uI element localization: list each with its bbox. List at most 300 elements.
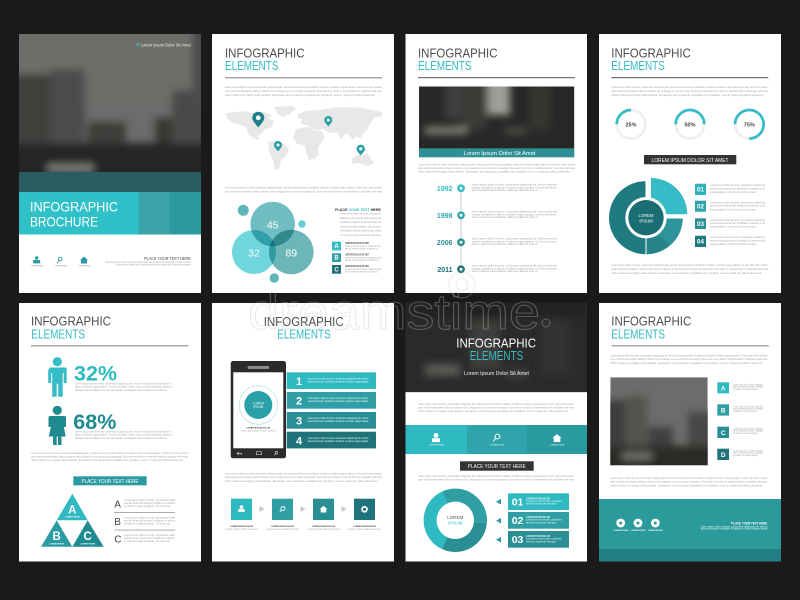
donut chart: IPSUM [448, 520, 463, 526]
paragraph: Lorem ipsum dolor sit amet, consectetur adipiscing elit, sed do eiusmod tempor incididunt ut labore et dolore magna aliqua. Ut enim ad minim veniam [611, 85, 769, 89]
timeline item 1998: 1998 [437, 213, 453, 220]
item 01: magna aliqua. Ut enim ad minim veniam [710, 190, 757, 194]
bar 2: Lorem ipsum dolor sit amet, consectetur adipiscing elit, sed do [308, 396, 369, 400]
process tile: gear: Lorem ipsum dolor sit amet [348, 527, 381, 531]
stat 32%: laboris nisi ut aliquip ex ea commodo consequat. Duis aute irure dolor in [75, 388, 168, 392]
map pin: Australia [356, 145, 365, 156]
paragraph: cillum dolore eu fugiat nulla pariatur. Excepteur sint occaecat cupidatat non proident, sunt in culpa qui officia deserunt [31, 458, 183, 462]
box 01: LOREM IPSUM DOLOR [526, 496, 550, 500]
bottom paragraph: quis nostrud exercitation ullamco laboris nisi ut aliquip ex ea commodo consequat. Duis aute irure dolor in reprehenderit in voluptate velit esse [611, 267, 769, 271]
heading [264, 314, 344, 341]
list A B C: sed do eiusmod tempor incididunt ut labore [124, 519, 175, 523]
box 03: sed do eiusmod tempor [526, 539, 556, 543]
box 03: Lorem ipsum dolor sit amet, consectetur [526, 537, 562, 541]
box 01 [508, 493, 569, 510]
venn text block [335, 207, 381, 237]
heading: INFOGRAPHIC [611, 314, 691, 329]
triangle diagram: B [53, 531, 61, 543]
timeline item 2011: tempor incididunt ut labore et dolore magna aliqua. Ut enim ad minim [472, 266, 557, 270]
timeline item 2006 [437, 236, 557, 247]
stat 32% [74, 362, 172, 392]
panel: smartphone page [212, 303, 394, 562]
bottom paragraph: cillum dolore eu fugiat nulla pariatur. Excepteur sint occaecat cupidatat non proident, sunt in culpa qui officia deserunt [611, 271, 762, 275]
list A B C D [717, 382, 763, 460]
heading: ELEMENTS [31, 327, 85, 341]
list A B C [332, 241, 381, 274]
paragraph [225, 472, 383, 483]
panel: timeline page [406, 34, 587, 293]
header photo [405, 300, 587, 392]
bar 4: Lorem ipsum dolor sit amet, consectetur adipiscing elit, sed do [308, 436, 369, 440]
bar 2: 2 [296, 396, 302, 408]
heading [225, 45, 382, 78]
photo caption band: Lorem Ipsum Dolor Sit Amet [464, 151, 536, 157]
progress ring 75% [735, 110, 764, 139]
box 02: sed do eiusmod tempor [526, 520, 556, 524]
paragraph: quis nostrud exercitation ullamco laboris nisi ut aliquip ex ea commodo consequat. Duis aute irure dolor in reprehenderit in voluptate velit esse [611, 89, 769, 93]
panel: cover brochure page [19, 34, 201, 293]
triangle diagram: A [68, 504, 76, 516]
item 04 [695, 235, 765, 247]
timeline item 1992: quis nostrud exercitation ullamco laboris nisi ut [472, 188, 538, 192]
bar 3: Lorem ipsum dolor sit amet, consectetur adipiscing elit, sed do [308, 416, 369, 420]
map caption paragraph: Lorem ipsum dolor sit amet, consectetur adipiscing elit, sed do eiusmod tempor incididunt ut labore et dolore magna aliqua. Ut enim ad minim veniam [225, 186, 383, 190]
item D [717, 448, 763, 460]
world map [226, 106, 382, 170]
timeline item 1992: 1992 [437, 186, 453, 193]
item D: D [721, 452, 726, 459]
icon: home [550, 434, 565, 446]
process tile: search: LOREM IPSUM DOLOR [271, 526, 294, 528]
footer text [701, 522, 768, 531]
item A [717, 382, 763, 393]
heading [611, 314, 769, 346]
stat 68%: laboris nisi ut aliquip ex ea commodo consequat. Duis aute irure dolor in [75, 436, 168, 440]
list A B C: LOREM IPSUM DOLOR SIT AMET [345, 241, 369, 245]
box 03: 03 [512, 534, 524, 546]
icon: search: LOREM IPSUM [490, 444, 505, 446]
list A B C: LOREM IPSUM DOLOR SIT AMET [345, 252, 369, 256]
list A B C [114, 498, 175, 546]
paragraph: cillum dolore eu fugiat nulla pariatur. Excepteur sint occaecat cupidatat non proident, sunt in culpa qui officia deserunt [418, 170, 570, 174]
list A B C: sed do eiusmod tempor incididunt ut [345, 270, 378, 274]
stat 68%: Lorem ipsum dolor sit amet, consectetur adipiscing elit, sed do eiusmod tempor incididunt ut [75, 430, 172, 434]
process tile: home: Lorem ipsum dolor sit amet [308, 527, 340, 531]
item 04: sed do eiusmod tempor incididunt ut labore et do [710, 238, 765, 242]
list A B C: et dolore magna aliqua. Ut enim ad [124, 522, 171, 526]
triangle diagram: LOREM IPSUM [65, 516, 80, 518]
process tile: gear: LOREM IPSUM DOLOR [353, 526, 376, 528]
item C: Lorem ipsum dolor sit amet, consectetur [733, 426, 763, 430]
footer text: eiusmod tempor incididunt ut labore et dolore magna aliqua [701, 527, 768, 531]
box 01: sed do eiusmod tempor [526, 502, 556, 506]
box 03 [508, 531, 569, 548]
bar 4 [287, 432, 376, 448]
list A B C: sed do eiusmod tempor incididunt ut labore [124, 501, 175, 505]
bar 1: eiusmod tempor incididunt ut labore et dolore magna aliqua [308, 380, 369, 384]
footer icons: LOREM IPSUM [648, 530, 663, 532]
pie chart [609, 178, 687, 254]
paragraph: cillum dolore eu fugiat nulla pariatur. Excepteur sint occaecat cupidatat non proident, sunt in culpa qui officia deserunt [611, 93, 764, 97]
smartphone [231, 361, 286, 458]
paragraph [31, 451, 189, 462]
arrow [260, 506, 264, 512]
smartphone: Lorem ipsum dolor sit amet, consect [241, 428, 275, 432]
item D: ut labore et dolore magna [733, 453, 758, 457]
cover icons row [31, 256, 90, 268]
bar 4: 4 [296, 435, 303, 447]
item A: A [721, 385, 726, 392]
smartphone: IPSUM [253, 405, 264, 409]
map pin: South America [274, 141, 282, 152]
map pin: Asia [324, 116, 332, 126]
item 03 [695, 218, 765, 229]
donut chart [430, 495, 480, 545]
black label: LOREM IPSUM DOLOR SIT AMET [652, 158, 729, 164]
process tile: person [226, 499, 258, 531]
stat 68%: labore et dolore magna aliqua. Ut enim ad minim veniam, quis nostrud exercitation ullamco [75, 433, 172, 437]
box 02: 02 [512, 515, 524, 527]
heading [611, 45, 768, 78]
item A: ut labore et dolore magna [733, 387, 758, 391]
item 02: sed do eiusmod tempor incididunt ut labore et do [710, 204, 765, 208]
header title [456, 336, 536, 377]
paragraph: Lorem ipsum dolor sit amet, consectetur adipiscing elit, sed do eiusmod tempor incididunt ut labore et dolore magna aliqua. Ut enim ad minim veniam [418, 474, 575, 478]
arrow [342, 506, 346, 512]
photo caption band [419, 148, 574, 157]
timeline item 1998: quis nostrud exercitation ullamco laboris nisi ut [472, 215, 538, 219]
paragraph: quis nostrud exercitation ullamco laboris nisi ut aliquip ex ea commodo consequat. Duis aute irure dolor in reprehenderit in voluptate velit esse [418, 166, 575, 170]
box 01: Lorem ipsum dolor sit amet, consectetur [526, 499, 562, 503]
cover text block: Lorem ipsum dolor sit amet, consectetur adipiscing elit, sed do eiusmod tempor incididunt ut labore et dolore [105, 260, 191, 264]
timeline item 2006: 2006 [437, 240, 453, 247]
paragraph: quis nostrud exercitation ullamco laboris nisi ut aliquip ex ea commodo consequat. Duis aute irure dolor in reprehenderit in voluptate velit esse [418, 478, 574, 482]
venn diagram: 32 [248, 248, 260, 260]
heading: INFOGRAPHIC [31, 314, 111, 329]
photo [419, 86, 574, 148]
map caption paragraph: quis nostrud exercitation ullamco laboris nisi ut aliquip ex ea commodo consequat. Duis aute irure dolor in reprehenderit in voluptate velit esse [225, 190, 382, 194]
stat 32%: 32% [74, 362, 117, 386]
progress ring 50% [676, 110, 704, 139]
item C [717, 426, 763, 438]
stat 68%: 68% [73, 410, 116, 434]
list A B C: et dolore magna aliqua. Ut enim ad [124, 539, 171, 543]
list A B C: et dolore magna aliqua. Ut enim ad [124, 504, 171, 508]
timeline item 1998 [437, 210, 557, 220]
panel: people statistics page [19, 303, 201, 562]
intro paragraph [225, 85, 383, 97]
pie chart: IPSUM [639, 218, 653, 223]
timeline item 2011: 2011 [437, 267, 453, 274]
venn diagram: 89 [285, 248, 297, 260]
stat 68% [73, 410, 172, 440]
item 02: 02 [697, 204, 704, 211]
timeline item 2006: quis nostrud exercitation ullamco laboris nisi ut [472, 242, 538, 246]
timeline item 2006: tempor incididunt ut labore et dolore magna aliqua. Ut enim ad minim [472, 239, 557, 243]
icon: person: LOREM IPSUM [429, 444, 444, 446]
process tile: person: LOREM IPSUM DOLOR [230, 526, 253, 528]
bar 3: eiusmod tempor incididunt ut labore et dolore magna aliqua [308, 419, 369, 423]
bar 3 [287, 412, 376, 429]
cover icons row: LOREM IPSUM [55, 266, 67, 268]
bar 1 [287, 372, 376, 389]
item 01: sed do eiusmod tempor incididunt ut labore et do [710, 186, 765, 190]
paragraph: Lorem ipsum dolor sit amet, consectetur adipiscing elit, sed do eiusmod tempor incididunt ut labore et dolore magna aliqua. Ut enim ad minim veniam [418, 402, 575, 406]
item B: B [721, 407, 726, 414]
triangle diagram: LOREM IPSUM [49, 544, 64, 546]
heading: INFOGRAPHIC [264, 314, 344, 329]
paragraph: cillum dolore eu fugiat nulla pariatur. Excepteur sint occaecat cupidatat non proident, sunt in culpa qui officia deserunt [418, 409, 568, 413]
black label: PLACE YOUR TEXT HERE [468, 464, 526, 470]
item 02: magna aliqua. Ut enim ad minim veniam [710, 207, 757, 211]
icon: home: LOREM IPSUM [550, 444, 565, 446]
progress ring 25%: 25% [625, 122, 637, 128]
cover photo of blurred city skyline [19, 34, 201, 172]
intro paragraph: Lorem ipsum dolor sit amet, consectetur adipiscing elit, sed do eiusmod tempor incididunt ut labore et dolore magna aliqua. Ut enim ad minim veniam [225, 85, 383, 89]
bar 4: eiusmod tempor incididunt ut labore et dolore magna aliqua [308, 439, 369, 443]
cover icons row: LOREM IPSUM [78, 266, 90, 268]
black label [644, 155, 736, 164]
progress ring 75%: 75% [744, 122, 755, 128]
item A: sed do eiusmod tempor incididunt [733, 385, 763, 389]
venn text block: incididunt ut labore et dolore magna ali [340, 220, 381, 224]
panel: photo list page [599, 303, 781, 562]
cover text block [105, 256, 191, 267]
item B [717, 404, 763, 416]
arrows [496, 499, 501, 542]
icon: search [490, 434, 505, 446]
paragraph: quis nostrud exercitation ullamco laboris nisi ut aliquip ex ea commodo consequat. Duis aute irure dolor in reprehenderit in voluptate velit esse [610, 357, 768, 361]
map caption paragraph [225, 186, 383, 194]
pie chart: LOREM [639, 213, 654, 218]
paragraph: cillum dolore eu fugiat nulla pariatur. Excepteur sint occaecat cupidatat non proident, sunt in culpa qui officia deserunt [610, 484, 763, 488]
cover text block: Ut enim ad minim veniam, quis nostrud exercitation ullamco laboris nisi ut aliquip ex ea commodo [115, 263, 191, 267]
paragraph: Lorem ipsum dolor sit amet, consectetur adipiscing elit, sed do eiusmod tempor incididunt ut labore et dolore magna aliqua. Ut enim ad minim veniam [225, 472, 383, 476]
timeline [437, 182, 557, 274]
panel: map and venn page [212, 34, 394, 293]
paragraph [610, 354, 768, 365]
footer icons: LOREM IPSUM [613, 530, 628, 532]
progress ring 50%: 50% [684, 122, 696, 128]
numbered bars [287, 372, 376, 448]
panel: dark header page [405, 300, 587, 562]
item 03: 03 [697, 221, 704, 228]
heading: ELEMENTS [611, 327, 665, 341]
item 01 [695, 183, 765, 195]
paragraph: cillum dolore eu fugiat nulla pariatur. Excepteur sint occaecat cupidatat non proident, sunt in culpa qui officia deserunt [610, 361, 763, 365]
item 03: magna aliqua. Ut enim ad minim veniam [710, 225, 757, 229]
list A B C: sed do eiusmod tempor incididunt ut [345, 246, 378, 250]
footer text: PLACE YOUR TEXT HERE [731, 522, 768, 526]
timeline item 1992 [437, 182, 557, 193]
item A: Lorem ipsum dolor sit amet, consectetur [733, 382, 763, 386]
cover title band: INFOGRAPHIC [30, 198, 118, 214]
icon: woman [49, 406, 66, 445]
list A B C: A [334, 244, 339, 250]
paragraph: quis nostrud exercitation ullamco laboris nisi ut aliquip ex ea commodo consequat. Duis aute irure dolor in reprehenderit in voluptate velit esse [31, 454, 188, 458]
map pin: North America [252, 112, 264, 128]
heading: INFOGRAPHIC [611, 45, 691, 60]
footer icons: LOREM IPSUM [631, 530, 646, 532]
footer icons [613, 519, 663, 532]
cover tagline: Lorem Ipsum Dolor Sit Amet [141, 42, 191, 47]
list A B C: C [114, 534, 122, 546]
stat 32%: labore et dolore magna aliqua. Ut enim ad minim veniam, quis nostrud exercitation ullamco [75, 385, 172, 389]
bar 1: 1 [296, 376, 302, 388]
paragraph: Lorem ipsum dolor sit amet, consectetur adipiscing elit, sed do eiusmod tempor incididunt ut labore et dolore magna aliqua. Ut enim ad minim veniam [610, 476, 768, 480]
venn text block: ex ea commodo consequat duis aute [340, 233, 381, 237]
arrow [300, 506, 306, 512]
heading: INFOGRAPHIC [418, 45, 498, 60]
item 04: magna aliqua. Ut enim ad minim veniam [710, 242, 757, 246]
item 04: Lorem ipsum dolor sit amet, consectetur adipiscing [710, 235, 765, 239]
watermark: dreamstime [248, 284, 540, 340]
item C: sed do eiusmod tempor incididunt [733, 429, 763, 433]
item 01: Lorem ipsum dolor sit amet, consectetur adipiscing [710, 183, 765, 187]
smartphone: LOREM IPSUM DOLOR [246, 427, 271, 429]
list A B C: Lorem ipsum dolor sit amet, consectetur adipi [124, 533, 175, 537]
list A B C: B [334, 256, 339, 262]
list A B C: Lorem ipsum dolor sit amet, consectetur adipi [345, 244, 381, 248]
list A B C: sed do eiusmod tempor incididunt ut [345, 258, 378, 262]
list A B C: LOREM IPSUM DOLOR SIT AMET [345, 264, 369, 268]
header title: ELEMENTS [470, 349, 523, 363]
bottom paragraph: Lorem ipsum dolor sit amet, consectetur adipiscing elit, sed do eiusmod tempor incididunt ut labore et dolore magna aliqua. Ut enim ad minim veniam [611, 263, 769, 267]
triangle diagram [41, 494, 104, 547]
icon band [406, 425, 587, 454]
paragraph: quis nostrud exercitation ullamco laboris nisi ut aliquip ex ea commodo consequat. Duis aute irure dolor in reprehenderit in voluptate velit esse [610, 480, 768, 484]
teal footer [599, 499, 781, 562]
teal label [73, 476, 147, 485]
intro paragraph: quis nostrud exercitation ullamco laboris nisi ut aliquip ex ea commodo consequat. Duis aute irure dolor in reprehenderit in voluptate velit esse [225, 89, 382, 93]
triangle diagram: C [84, 531, 92, 543]
paragraph: quis nostrud exercitation ullamco laboris nisi ut aliquip ex ea commodo consequat. Duis aute irure dolor in reprehenderit in voluptate velit esse [225, 475, 382, 479]
process tile: gear [348, 499, 381, 531]
dark teal band [19, 172, 201, 192]
item 02: Lorem ipsum dolor sit amet, consectetur adipiscing [710, 200, 765, 204]
heading: ELEMENTS [611, 59, 665, 73]
list A B C: Lorem ipsum dolor sit amet, consectetur adipi [124, 516, 175, 520]
cover title band [19, 192, 201, 234]
timeline item 2011: Lorem ipsum dolor sit amet, consectetur adipiscing elit, sed do eiusmod [472, 264, 557, 268]
item 03: Lorem ipsum dolor sit amet, consectetur adipiscing [710, 218, 765, 222]
item D: Lorem ipsum dolor sit amet, consectetur [733, 448, 763, 452]
list A B C: B [114, 517, 121, 528]
process tile: search [266, 499, 299, 531]
box 02: Lorem ipsum dolor sit amet, consectetur [526, 518, 562, 522]
list A B C: Lorem ipsum dolor sit amet, consectetur adipi [345, 255, 381, 259]
list A B C: Lorem ipsum dolor sit amet, consectetur adipi [124, 498, 175, 502]
footer text: Lorem ipsum dolor sit amet, consectetur adipiscing elit, sed do [701, 524, 768, 528]
paragraph [611, 85, 769, 97]
timeline item 2011 [437, 264, 557, 274]
paragraph [418, 402, 575, 413]
process tile: home: LOREM IPSUM DOLOR [312, 526, 335, 528]
venn text block: exercitation ullamco laboris nisi ut aliq [340, 229, 381, 233]
timeline item 2006: Lorem ipsum dolor sit amet, consectetur adipiscing elit, sed do eiusmod [472, 236, 557, 240]
smartphone: LOREM [253, 402, 264, 406]
venn text block: adipiscing elit, sed do eiusmod tempor [340, 216, 381, 220]
list A B C: Lorem ipsum dolor sit amet, consectetur adipi [345, 267, 381, 271]
item 03: sed do eiusmod tempor incididunt ut labore et do [710, 221, 765, 225]
venn text block: PLACE YOUR TEXT HERE [335, 207, 381, 212]
paragraph: Lorem ipsum dolor sit amet, consectetur adipiscing elit, sed do eiusmod tempor incididunt ut labore et dolore magna aliqua. Ut enim ad minim veniam [31, 451, 189, 455]
box 02 [508, 512, 569, 529]
paragraph [418, 474, 575, 482]
box 02: LOREM IPSUM DOLOR [526, 515, 550, 519]
timeline item 1992: tempor incididunt ut labore et dolore magna aliqua. Ut enim ad minim [472, 185, 557, 189]
bottom paragraph [611, 263, 769, 275]
heading [31, 314, 188, 346]
venn text block: Ut enim ad minim veniam, quis nostrud [340, 224, 381, 228]
item B: sed do eiusmod tempor incididunt [733, 407, 763, 411]
box 01: 01 [512, 496, 524, 508]
paragraph: cillum dolore eu fugiat nulla pariatur. Excepteur sint occaecat cupidatat non proident, sunt in culpa qui officia deserunt [225, 479, 377, 483]
icon: man [48, 357, 67, 397]
header title: INFOGRAPHIC [456, 336, 536, 351]
process tile: home [308, 499, 340, 531]
process tile: person: Lorem ipsum dolor sit amet [226, 527, 258, 531]
item D: sed do eiusmod tempor incididunt [733, 451, 763, 455]
bar 1: Lorem ipsum dolor sit amet, consectetur adipiscing elit, sed do [308, 376, 369, 380]
process tile: search: Lorem ipsum dolor sit amet [266, 527, 299, 531]
item B: Lorem ipsum dolor sit amet, consectetur [733, 404, 763, 408]
heading: INFOGRAPHIC [225, 45, 304, 60]
cover icons row: LOREM IPSUM [31, 266, 43, 268]
progress ring 25% [617, 110, 645, 139]
heading: ELEMENTS [418, 59, 472, 73]
bar 2: eiusmod tempor incididunt ut labore et dolore magna aliqua [308, 399, 369, 403]
donut chart: LOREM [447, 515, 464, 520]
photo [610, 377, 708, 466]
paragraph [418, 162, 576, 174]
cover text block: PLACE YOUR TEXT HERE [144, 256, 191, 261]
venn text block: Lorem ipsum dolor sit amet, consectetur [340, 212, 381, 216]
triangle diagram: LOREM IPSUM [80, 544, 95, 546]
bar 3: 3 [296, 416, 302, 428]
numbered list [695, 183, 765, 247]
paragraph: Lorem ipsum dolor sit amet, consectetur adipiscing elit, sed do eiusmod tempor incididunt ut labore et dolore magna aliqua. Ut enim ad minim veniam [418, 162, 576, 166]
black label [460, 461, 534, 471]
timeline item 1998: Lorem ipsum dolor sit amet, consectetur adipiscing elit, sed do eiusmod [472, 210, 557, 214]
intro paragraph: cillum dolore eu fugiat nulla pariatur. Excepteur sint occaecat cupidatat non proident, sunt in culpa qui officia deserunt [225, 93, 375, 97]
stat 32%: Lorem ipsum dolor sit amet, consectetur adipiscing elit, sed do eiusmod tempor incididunt ut [75, 382, 172, 386]
paragraph: Lorem ipsum dolor sit amet, consectetur adipiscing elit, sed do eiusmod tempor incididunt ut labore et dolore magna aliqua. Ut enim ad minim veniam [610, 354, 768, 358]
timeline item 1992: Lorem ipsum dolor sit amet, consectetur adipiscing elit, sed do eiusmod [472, 182, 557, 186]
heading: ELEMENTS [225, 59, 278, 73]
timeline item 1998: tempor incididunt ut labore et dolore magna aliqua. Ut enim ad minim [472, 212, 557, 216]
venn diagram: 45 [267, 220, 279, 232]
heading [418, 45, 575, 78]
cover title band: BROCHURE [30, 214, 98, 230]
bar 2 [287, 392, 376, 409]
item 04: 04 [697, 239, 704, 246]
heading: ELEMENTS [277, 327, 331, 341]
timeline item 2011: quis nostrud exercitation ullamco laboris nisi ut [472, 269, 538, 273]
icon: person [429, 433, 444, 446]
paragraph [610, 476, 768, 488]
list A B C: sed do eiusmod tempor incididunt ut labore [124, 536, 175, 540]
panel: charts page [599, 34, 781, 293]
item 01: 01 [697, 187, 704, 194]
header title: Lorem Ipsum Dolor Sit Amet [464, 371, 530, 377]
box 03: LOREM IPSUM DOLOR [526, 534, 550, 538]
item B: ut labore et dolore magna [733, 409, 758, 413]
item C: C [721, 430, 726, 437]
list A B C: A [114, 500, 121, 510]
venn diagram [232, 202, 314, 283]
paragraph: quis nostrud exercitation ullamco laboris nisi ut aliquip ex ea commodo consequat. Duis aute irure dolor in reprehenderit in voluptate velit esse [418, 406, 574, 410]
